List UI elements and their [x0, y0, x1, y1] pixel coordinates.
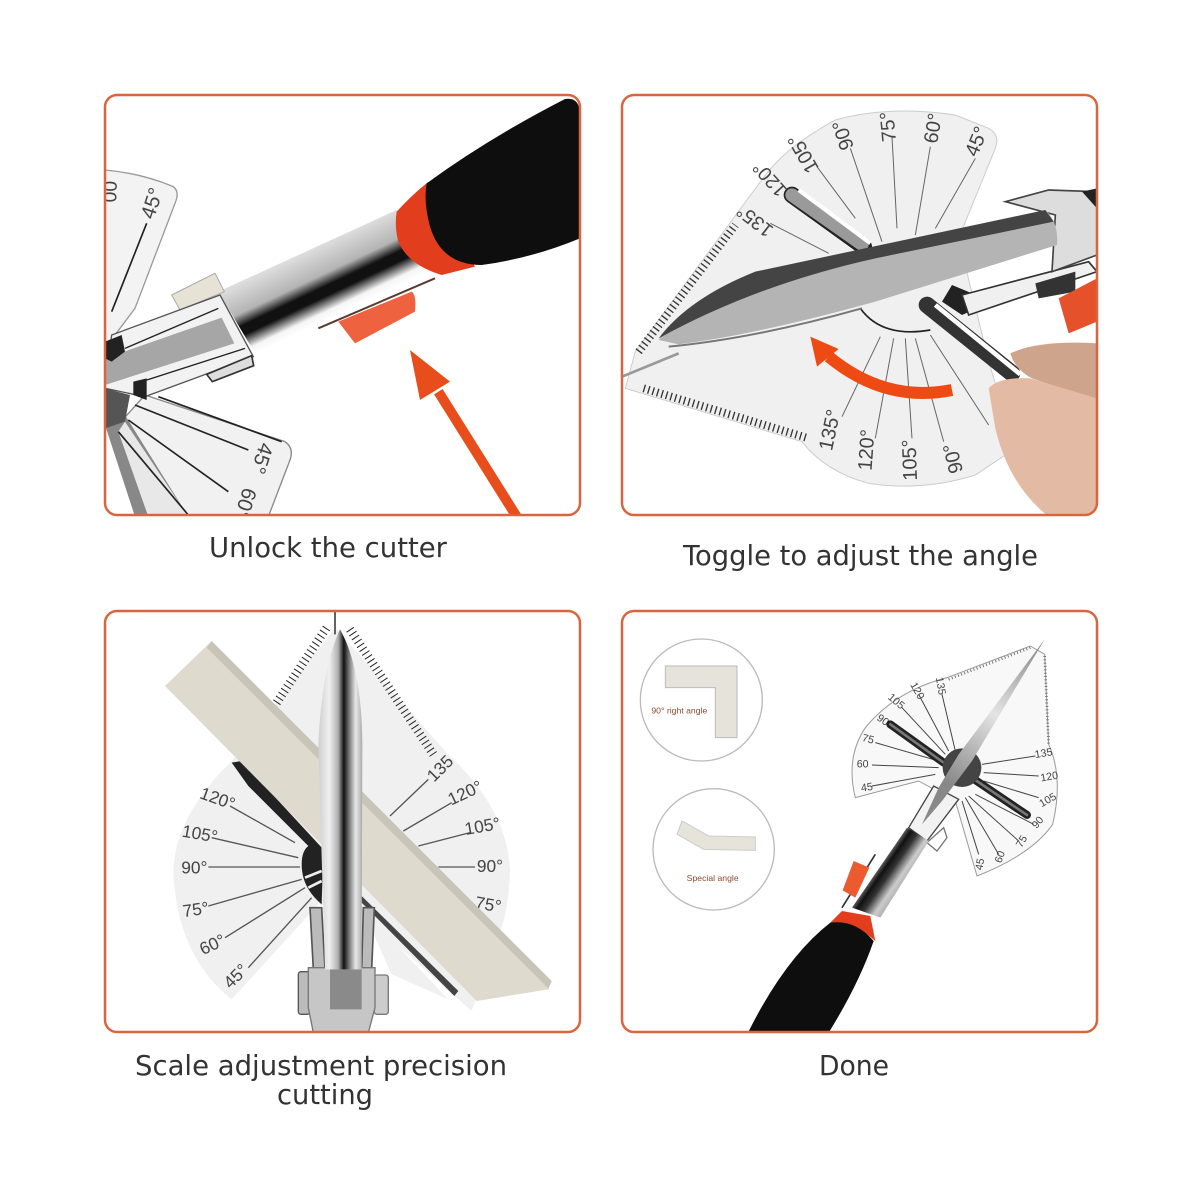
scale numbers: 45°	[219, 960, 252, 992]
protractor plate	[852, 646, 1057, 876]
small scale numbers: 90	[1030, 814, 1046, 831]
scale numbers: 75°	[876, 111, 901, 143]
small scale numbers: 120	[907, 680, 927, 702]
protractor plate: upper	[106, 170, 178, 341]
red collar	[830, 911, 875, 941]
protractor plate: upper: 45°	[137, 185, 168, 222]
beige trim strip	[165, 641, 552, 1001]
panel: unlock the cutter	[100, 95, 580, 522]
small scale numbers: 75	[1014, 833, 1030, 850]
guard tab	[927, 828, 947, 851]
adjuster slot upper	[792, 190, 870, 247]
small scale numbers: 135	[1034, 746, 1054, 761]
scale numbers: 45°	[961, 124, 993, 160]
scale numbers: 135°	[815, 407, 845, 453]
angle lines	[770, 137, 989, 442]
slots	[890, 724, 1027, 815]
scale numbers: 105°	[463, 813, 502, 839]
red collar	[396, 182, 475, 275]
protractor plate: upper: 00	[100, 181, 122, 203]
angle lines	[872, 694, 1039, 854]
small scale numbers: 45	[973, 857, 987, 871]
protractor plate: lower	[105, 395, 291, 522]
scale numbers: 120°	[855, 429, 879, 471]
curved arrow	[810, 337, 952, 393]
dark mechanism	[232, 761, 458, 999]
ruler ticks	[277, 628, 433, 754]
small scale numbers: 45	[860, 781, 874, 794]
toggle lever	[927, 305, 1020, 374]
caption: unlock the cutter: Unlock the cutter	[209, 532, 448, 564]
scale numbers: 75°	[474, 892, 503, 916]
caption: done: Done	[819, 1050, 889, 1082]
ruler ticks	[949, 648, 1049, 744]
caption: scale adjustment precision cutting	[135, 1050, 507, 1111]
small scale numbers: 105	[885, 691, 907, 712]
angle lines	[208, 779, 475, 968]
arm	[852, 828, 929, 918]
blade	[922, 639, 1045, 824]
mechanism at right	[942, 188, 1097, 333]
scale numbers: 120°	[749, 156, 792, 200]
caption: scale adjustment precision cutting: cutting	[277, 1079, 373, 1111]
small scale numbers: 120	[1040, 770, 1059, 784]
cutter base	[298, 908, 388, 1033]
example circle: special angle: Special angle	[687, 873, 739, 883]
small scale numbers	[857, 676, 1059, 871]
caption: scale adjustment precision cutting: Scale adjustment precision	[135, 1050, 507, 1082]
vertical blade	[318, 611, 362, 969]
panel: toggle to adjust the angle	[622, 95, 1097, 517]
fingers	[989, 343, 1097, 517]
cutter head	[105, 273, 254, 428]
example circle: 90 degree right angle	[640, 639, 762, 761]
scale numbers: 120°	[445, 776, 485, 809]
panel: done	[622, 611, 1097, 1033]
cutter pivot	[943, 748, 981, 787]
protractor plate: lower: 60°	[229, 485, 261, 522]
scale numbers: 60°	[196, 930, 228, 959]
scale numbers: 135°	[733, 199, 778, 241]
scale numbers: 105°	[181, 821, 219, 847]
scale numbers: 90°	[829, 117, 859, 153]
caption: toggle to adjust the angle: Toggle to adjust the angle	[682, 540, 1038, 572]
small scale numbers: 90	[874, 712, 891, 729]
small scale numbers: 75	[861, 732, 875, 747]
small scale numbers: 60	[857, 758, 869, 770]
scale numbers: 90°	[939, 441, 968, 476]
ruler ticks	[639, 225, 809, 438]
scale numbers: 60°	[920, 112, 947, 145]
panel: scale adjustment precision cutting	[105, 611, 580, 1033]
scale numbers	[181, 751, 503, 992]
example circle: special angle	[653, 789, 774, 910]
protractor plate	[173, 628, 510, 1011]
steel shaft	[218, 210, 427, 353]
small scale numbers: 60	[993, 849, 1008, 865]
blade	[659, 210, 1057, 347]
black handle	[748, 922, 874, 1033]
protractor plate	[625, 111, 1015, 486]
scale numbers: 90°	[477, 856, 503, 876]
protractor plate: lower: 45°	[246, 440, 277, 477]
cutter head	[909, 786, 959, 841]
scale numbers: 105°	[899, 439, 922, 481]
black rubber handle	[426, 99, 580, 265]
small scale numbers: 105	[1037, 791, 1059, 810]
scale numbers: 105°	[784, 130, 824, 177]
arrow	[410, 350, 517, 517]
scale numbers	[733, 111, 993, 481]
scale numbers: 75°	[181, 898, 210, 921]
scale numbers: 120°	[197, 783, 238, 814]
scale numbers: 135	[423, 751, 457, 786]
small scale numbers: 135	[933, 676, 948, 696]
scale numbers: 90°	[181, 858, 207, 878]
orange lock tab	[318, 278, 435, 343]
guide line	[622, 353, 679, 377]
example circle: 90 degree right angle: 90° right angle	[651, 706, 707, 716]
orange tab	[842, 854, 875, 908]
